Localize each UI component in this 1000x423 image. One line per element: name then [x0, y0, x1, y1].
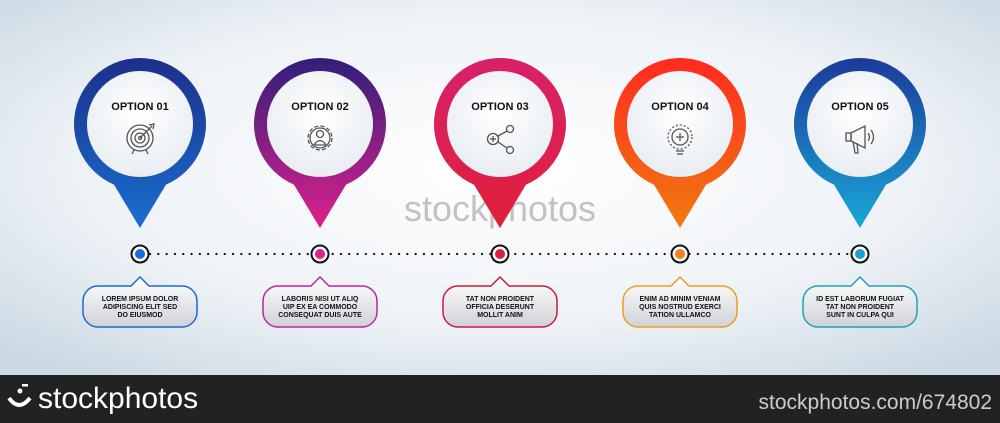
text box 3 — [443, 277, 557, 327]
label: OPTION 03 — [471, 101, 529, 113]
text box 2: UIP EX EA COMMODO — [283, 304, 358, 311]
icon: bulb — [668, 125, 692, 154]
label: OPTION 02 — [291, 101, 349, 113]
label: OPTION 05 — [831, 101, 889, 113]
pin 5 — [794, 58, 926, 228]
pin 2 — [254, 58, 386, 228]
label: OPTION 04 — [651, 101, 710, 113]
text box 4: TATION ULLAMCO — [649, 312, 712, 319]
label: OPTION 01 — [111, 101, 169, 113]
text box 3: TAT NON PROIDENT — [466, 296, 535, 303]
text box 4: ENIM AD MINIM VENIAM — [639, 296, 721, 303]
pin 3 — [434, 58, 566, 228]
text box 3: OFFICIA DESERUNT — [466, 304, 535, 311]
text box 2: CONSEQUAT DUIS AUTE — [278, 312, 362, 319]
icon: gear person — [308, 126, 332, 150]
footer: stockphotos — [38, 382, 198, 415]
text box 2 — [263, 277, 377, 327]
text box 5 — [803, 277, 917, 327]
icon: target — [127, 124, 154, 154]
footer — [0, 375, 1000, 423]
text box 5: SUNT IN CULPA QUI — [826, 312, 894, 319]
pin 1 — [74, 58, 206, 228]
text box 1: ADIPISCING ELIT SED — [103, 304, 177, 311]
text box 5: ID EST LABORUM FUGIAT — [816, 296, 905, 303]
text box 5: TAT NON PROIDENT — [826, 304, 895, 311]
text box 4 — [623, 277, 737, 327]
pin 4 — [614, 58, 746, 228]
footer logo — [9, 384, 30, 405]
text box 4: QUIS NOSTRUD EXERCI — [639, 304, 721, 311]
icon: megaphone — [846, 126, 874, 153]
timeline dots — [132, 246, 868, 262]
text box 3: MOLLIT ANIM — [477, 312, 523, 319]
text box 1 — [83, 277, 197, 327]
text box 1: LOREM IPSUM DOLOR — [102, 296, 178, 303]
text box 2: LABORIS NISI UT ALIQ — [282, 296, 359, 303]
icon: share — [488, 126, 514, 154]
footer url: stockphotos.com/674802 — [759, 391, 992, 414]
text box 1: DO EIUSMOD — [117, 312, 163, 319]
watermark: stockphotos — [404, 188, 596, 229]
timeline dotted line — [150, 253, 850, 255]
